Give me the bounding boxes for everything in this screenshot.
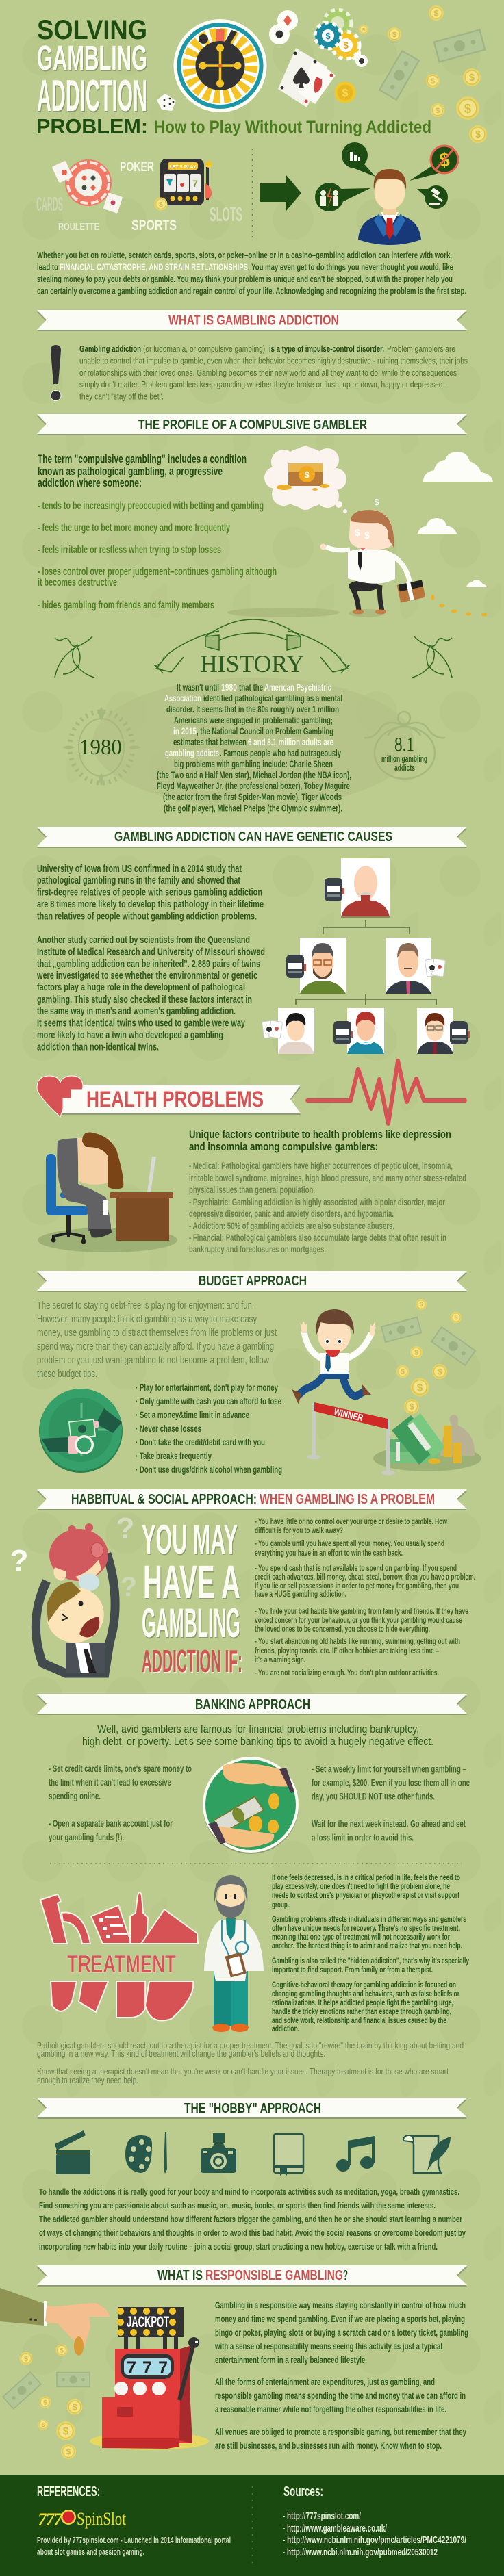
icon: poker chips	[315, 10, 360, 59]
title: SOLVING	[37, 15, 147, 45]
heading: budget approach: BUDGET APPROACH	[199, 1274, 307, 1289]
list: gambler traits: it becomes destructive	[38, 577, 117, 589]
heading: what is responsible gambling: ?	[343, 2268, 348, 2283]
text block: genetic causes: the same way in men's and women's gambling addiction.	[37, 1006, 236, 1017]
list: budget tips: · Set a money&time limit in advance	[136, 1410, 249, 1420]
icon: playing cards	[278, 48, 336, 107]
heading: history ribbon	[155, 619, 349, 678]
text block: therapy note: gambling in a new way. This kind of treatment will change the gambler's beliefs and thoughts.	[37, 2048, 325, 2059]
chart: family tree	[262, 858, 470, 1054]
icon: poker chips: $	[343, 40, 349, 51]
text block: history: . Famous people who had outrageously	[220, 747, 341, 758]
list: banking tips right: a loss limit in order to avoid this.	[312, 1833, 414, 1842]
heading: budget approach	[37, 1271, 467, 1292]
panel: footer	[0, 2475, 504, 2576]
callout: you may have a gambling addiction if: HAVE A	[144, 1557, 241, 1610]
heading: genetic causes: GAMBLING ADDICTION CAN HAVE GENETIC CAUSES	[114, 829, 392, 845]
list: gambler traits: - tends to be increasingly preoccupied with betting and gambling	[38, 500, 264, 512]
list: gambler traits: - feels irritable or restless when trying to stop losses	[38, 544, 221, 556]
heading: what is responsible gambling	[37, 2265, 467, 2287]
list: banking tips left: your gambling funds (!).	[49, 1832, 124, 1842]
portrait: child right	[417, 1008, 453, 1054]
panel: gambling types	[36, 159, 242, 233]
text block: health problems: - Addiction: 50% of gambling addicts are also substance abusers.	[189, 1221, 394, 1231]
icon: suit tokens	[269, 10, 368, 67]
title: GAMBLING	[37, 38, 147, 77]
text block: definition: Problem gamblers are	[387, 344, 455, 354]
icon: treatment lower symbols	[51, 1981, 193, 2020]
list: budget tips: · Play for entertainment, don't play for money	[136, 1382, 278, 1393]
text block: genetic causes: University of Iowa from US confirmed in a 2014 study that	[37, 864, 242, 875]
text block: definition: Gambling addiction	[79, 344, 141, 354]
heading: banking approach: BANKING APPROACH	[195, 1697, 310, 1712]
text block: genetic causes: Institute of Medical Research and University of Missouri showed	[37, 947, 265, 958]
icon: winner hurdle	[307, 1402, 395, 1476]
list: banking tips left: - Open a separate bank account just for	[49, 1818, 173, 1829]
stat: 8.1 million gambling addicts medallion: million gambling	[381, 754, 427, 764]
text block: genetic causes: than relatives of people without gambling addiction problems.	[37, 912, 257, 923]
text block: history	[157, 682, 351, 813]
decoration: right vine	[412, 636, 452, 678]
heading: references: REFERENCES:	[37, 2484, 100, 2499]
heading: habitual and social approach: WHEN GAMBLING IS A PROBLEM	[260, 1492, 435, 1507]
text: SLOTS	[210, 204, 242, 226]
heading: genetic causes	[37, 827, 467, 848]
text block: compulsive gambling lead	[38, 453, 247, 489]
portrait: child middle	[347, 1008, 384, 1054]
text block: history: It wasn't until	[177, 682, 219, 693]
list: warning signs: difficult is for you to walk away?	[255, 1527, 343, 1535]
text block: history: estimates that between	[173, 736, 247, 747]
list: gambler traits: - loses control over proper judgement–continues gambling although	[38, 566, 277, 578]
text block: budget intro	[37, 1300, 277, 1380]
logo: 777SpinSlot	[38, 2509, 127, 2529]
text block: genetic causes: addiction than non-identical twins.	[37, 1042, 159, 1053]
text block: definition: (or ludomania, or compulsive gambling),	[143, 344, 267, 354]
label: sports: SPORTS	[131, 218, 177, 233]
text block: history: identified pathological gambling as a mental	[203, 693, 342, 704]
icon: gold coins and bills	[334, 5, 487, 143]
icon: worried businessman with consequences: $	[439, 149, 450, 170]
panel: gambling types: CARDS	[36, 194, 63, 216]
list: source links	[283, 2511, 466, 2558]
text block: history: American Psychiatric	[264, 682, 331, 693]
portrait: father left	[300, 938, 346, 994]
text block: compulsive gambling lead: The term "compulsive gambling" includes a condition	[38, 453, 247, 465]
text block: genetic causes: are 8 times more likely to develop this pathology in their lifetime	[37, 899, 264, 910]
list: warning signs: - You are not socializing enough. You don't plan outdoor activities.	[255, 1669, 439, 1677]
list: warning signs: the loved ones to be concerned, you choose to hide everything.	[255, 1625, 430, 1634]
icon: music note	[336, 2136, 375, 2172]
text block: treatment: group.	[272, 1900, 289, 1909]
heading: health problems	[37, 1076, 301, 1117]
icon: thought bubble with treasure chest	[264, 446, 379, 513]
text block: health problems: depressive disorder, panic and anxiety disorders, and hypomania.	[189, 1209, 394, 1219]
text block: intro	[37, 250, 466, 296]
text block: health problems: physical issues than general population.	[189, 1185, 315, 1195]
icon: falling coins and bills	[3, 2345, 90, 2459]
icon: jackpot slot machine	[90, 2307, 209, 2450]
text block: history: gambling addicts	[165, 747, 219, 758]
label: roulette: ROULETTE	[58, 222, 99, 233]
logo: 777SpinSlot: SpinSlot	[77, 2509, 127, 2529]
text block: history: Association	[164, 693, 201, 704]
icon: time is money dial	[39, 1389, 123, 1473]
list: budget tips: · Only gamble with cash you can afford to lose	[136, 1396, 281, 1406]
callout: you may have a gambling addiction if	[142, 1517, 243, 1680]
list: banking tips right	[312, 1764, 470, 1842]
text block: genetic causes	[36, 864, 265, 1053]
icon: clouds	[418, 452, 493, 587]
list: warning signs	[255, 1518, 475, 1677]
icon: red chip	[52, 159, 123, 214]
text block: compulsive gambling lead: known as pathological gambling, a progressive	[38, 465, 223, 478]
callout: you may have a gambling addiction if: YOU MAY	[142, 1518, 238, 1564]
logo: 777SpinSlot: 777	[38, 2510, 63, 2529]
text block: budget intro: problem or you just want gambling to not become a problem, follow	[37, 1354, 269, 1366]
stat: 8.1 million gambling addicts medallion: addicts	[394, 762, 415, 773]
text block: definition: they can't "stay off the bet".	[79, 391, 164, 401]
list: banking tips left: the limit when it can't lead to excessive	[49, 1777, 171, 1788]
text block: genetic causes: factors play a huge role in the development of pathological	[37, 982, 245, 993]
list: budget tips: · Don't use drugs/drink alcohol when gambling	[136, 1465, 282, 1475]
heading: profile of a compulsive gambler	[37, 414, 467, 435]
list: budget tips: · Don't take the credit/debit card with you	[136, 1437, 265, 1447]
heading: the hobby approach	[37, 2098, 467, 2119]
text block: treatment: addiction.	[272, 2024, 299, 2033]
icon: daydreaming gambler	[227, 510, 487, 617]
icon: money pile and coins	[373, 1299, 481, 1471]
icon: palette and brush	[125, 2132, 167, 2174]
heading: what is responsible gambling: RESPONSIBLE GAMBLING	[205, 2268, 343, 2283]
text block: therapy note: enough to realize they need help.	[37, 2075, 138, 2085]
portrait: child left	[278, 1008, 314, 1054]
icon: man with piggy bank: ?	[10, 1544, 28, 1577]
text block: history: (the Two and a Half Men star), Michael Jordan (the NBA icon),	[157, 769, 351, 780]
text block: genetic causes: It seems that identical twins who used to gamble were way	[37, 1018, 245, 1029]
text block: intro: lead to	[37, 261, 58, 272]
text block: history: (the golf player), Michael Phelps (the Olympic swimmer).	[164, 802, 342, 813]
stat: 8.1 million gambling addicts medallion: 8.1	[394, 734, 414, 756]
heading: habitual and social approach	[37, 1489, 467, 1510]
list: warning signs: have a HUGE gambling addiction.	[255, 1590, 346, 1599]
stat: 1980 medallion	[62, 707, 141, 786]
text block: intro: FINANCIAL CATASTROPHE, AND STRAIN RETLATIONSHIPS	[60, 261, 248, 272]
icon: daydreaming gambler: $	[364, 530, 370, 541]
heading: profile of a compulsive gambler: THE PROFILE OF A COMPULSIVE GAMBLER	[138, 417, 367, 433]
icon: thought bubble with treasure chest: $	[304, 469, 310, 480]
list: warning signs: everything you have in an effort to win the cash back.	[255, 1549, 403, 1558]
text block: health problems	[189, 1128, 466, 1254]
title: ADDICTION	[38, 72, 148, 122]
text block: genetic causes: were investigated to see whether the environmental or genetic	[36, 970, 257, 981]
text block: health problems: and insomnia among compulsive gamblers:	[189, 1140, 378, 1153]
text block: provider: Provided by 777spinslot.com - Launched in 2014 informational portal	[37, 2535, 231, 2545]
text block: history: (the actor from the first Spider-Man movie), Tiger Woods	[163, 791, 342, 802]
title: GAMBLING	[38, 40, 148, 79]
heading: history ribbon: HISTORY	[200, 650, 304, 678]
list: banking tips left: spending online.	[49, 1791, 101, 1801]
text: GAMBLING	[142, 1601, 241, 1647]
icon: doctor	[204, 1875, 264, 2032]
text block: budget intro: spend way more than they can actually afford. If you have a gambling	[37, 1341, 274, 1352]
text block: treatment	[272, 1872, 469, 2033]
arrow	[260, 175, 301, 211]
heading: what is gambling addiction: WHAT IS GAMBLING ADDICTION	[168, 313, 339, 329]
callout: you may have a gambling addiction if: HAVE A	[143, 1556, 240, 1608]
icon: roulette wheel	[174, 19, 267, 112]
icon: hand dropping coin	[0, 2288, 110, 2356]
text block: responsible gambling	[214, 2300, 468, 2451]
text block: history: in 2015	[173, 725, 197, 736]
text block: history: Americans were engaged in problematic gambling;	[174, 714, 333, 725]
list: warning signs: it's a warning sign.	[255, 1656, 305, 1664]
heading: banking approach	[37, 1694, 467, 1715]
text: ADDICTION IF:	[142, 1643, 242, 1679]
heading: habitual and social approach: HABBITUAL & SOCIAL APPROACH:	[71, 1492, 257, 1507]
text block: budget intro: The secret to staying debt-free is playing for enjoyment and fun.	[37, 1300, 254, 1311]
icon: poker chips: $	[325, 31, 331, 41]
text block: budget intro: these budget tips.	[37, 1368, 97, 1380]
text block: therapy note	[37, 2040, 464, 2085]
icon: scroll and quill	[403, 2135, 451, 2173]
icon: man with piggy bank	[10, 1512, 137, 1673]
decoration: left vine	[55, 636, 94, 678]
text block: provider: about slot games and passion gaming.	[37, 2547, 144, 2557]
list: banking tips left	[49, 1764, 192, 1842]
heading: health problems: HEALTH PROBLEMS	[86, 1087, 264, 1111]
text block: treatment: important to find support. From family or from a therapist.	[272, 1965, 433, 1974]
list: budget tips	[136, 1382, 282, 1475]
list: source links: - http://www.ncbi.nlm.nih.gov/pubmed/20530012	[283, 2547, 438, 2558]
icon: slot machine: LET'S PLAY	[169, 165, 197, 170]
label: poker: POKER	[120, 160, 154, 175]
icon: man at desk	[38, 1133, 177, 1252]
icon: slot machine: 7	[192, 178, 198, 189]
title: ADDICTION	[37, 70, 147, 120]
icon: treatment medical symbols	[40, 1892, 198, 1944]
heading: what is gambling addiction	[37, 310, 467, 331]
text block: definition: is a type of impulse-control disorder.	[269, 344, 384, 354]
icon: winner hurdle: WINNER	[333, 1406, 364, 1424]
list: source links: - http://777spinslot.com/	[283, 2511, 361, 2522]
text block: compulsive gambling lead: addiction where someone:	[38, 477, 142, 489]
icon: jackpot slot machine: 777	[127, 2358, 168, 2378]
text block: history: big problems with gambling include: Charlie Sheen	[174, 758, 333, 769]
icon: dice	[157, 94, 176, 111]
text block: banking intro: Well, avid gamblers are famous for financial problems including bankruptcy,	[97, 1723, 419, 1736]
icon: camera	[201, 2133, 236, 2173]
list: budget tips: · Take breaks frequently	[136, 1451, 212, 1461]
text block: history: that the	[239, 682, 263, 693]
icon: hands exchanging money	[203, 1757, 299, 1854]
icon: gold coins and bills: $	[342, 88, 349, 99]
text: GAMBLING	[142, 1600, 240, 1646]
heading: treatment: TREATMENT	[67, 1950, 176, 1978]
callout: you may have a gambling addiction if: YOU MAY	[142, 1517, 238, 1562]
list: gambler traits: - hides gambling from friends and family members	[38, 600, 214, 611]
icon: thought bubble with treasure chest: $	[374, 497, 379, 507]
text block: history: 6 and 8.1 million adults are	[248, 736, 333, 747]
text block: history: Floyd Mayweather Jr. (the professional boxer), Tobey Maguire	[157, 780, 350, 791]
icon: jumping businessman	[292, 1309, 376, 1404]
text: ADDICTION IF:	[142, 1645, 243, 1680]
icon: exclamation mark	[51, 345, 61, 401]
text block: banking intro: high debt, or poverty. Let's see some banking tips to avoid a hugely negative effect.	[82, 1735, 433, 1748]
list: source links: - http://www.gambleaware.co.uk/	[283, 2523, 387, 2534]
text block: genetic causes: gambling. This study also checked if these factors interact in	[37, 994, 252, 1005]
text block: responsible gambling: entertainment form in a really balanced lifestyle.	[215, 2354, 367, 2365]
list: banking tips left: - Set credit cards limits, one's spare money to	[49, 1764, 192, 1774]
icon: jackpot slot machine: JACKPOT	[127, 2313, 169, 2330]
title: PROBLEM:	[36, 114, 148, 138]
text block: health problems: bankruptcy and foreclosures on mortgages.	[189, 1244, 326, 1254]
text block: history: , the National Council on Problem Gambling	[197, 725, 333, 736]
text block: genetic causes: more likely to have a twin who developed a gambling	[37, 1030, 223, 1041]
icon: man with piggy bank: ?	[116, 1512, 134, 1545]
icon: book	[274, 2134, 303, 2176]
icon: daydreaming gambler: $	[355, 527, 360, 538]
heading: what is responsible gambling: WHAT IS	[158, 2268, 203, 2283]
text block: hobby approach	[39, 2187, 466, 2252]
text block: history: disorder. It seems that in the 80s roughly over 1 million	[166, 704, 339, 714]
text block: banking intro	[82, 1723, 433, 1748]
list: gambler traits	[38, 500, 277, 611]
portrait: father right	[386, 938, 431, 994]
text block: budget intro: money, use gambling to distract themselves from life problems or just	[37, 1327, 277, 1339]
list: budget tips: · Never chase losses	[136, 1424, 201, 1434]
text block: budget intro: However, many people think of gambling as a way to make easy	[37, 1313, 257, 1325]
portrait: grandfather	[341, 858, 390, 918]
chart: heartbeat line	[307, 1061, 465, 1124]
heading: sources: Sources:	[284, 2484, 323, 2499]
text block: genetic causes: first-degree relatives of people with serious gambling addiction	[37, 887, 262, 898]
stat: 1980 medallion: 1980	[79, 734, 122, 759]
heading: the hobby approach: THE "HOBBY" APPROACH	[184, 2101, 321, 2116]
text block: genetic causes: pathological gambling runs in the family and showed that	[37, 875, 240, 886]
text block: definition	[79, 344, 468, 401]
stat: 8.1 million gambling addicts medallion	[364, 712, 445, 779]
text block: genetic causes: that „gambling addiction can be inherited”. 2,889 pairs of twins	[37, 959, 260, 970]
text block: history: 1980	[221, 682, 237, 693]
title	[36, 15, 431, 138]
icon: worried businessman with consequences	[315, 142, 458, 245]
text block: genetic causes: Another study carried out by scientists from the Queensland	[37, 935, 250, 946]
list: banking tips right: day, you SHOULD NOT use other funds.	[312, 1792, 435, 1801]
icon: slot machine	[155, 159, 212, 211]
icon: film clapper	[55, 2130, 90, 2174]
title: How to Play Without Turning Addicted	[154, 118, 431, 137]
list: gambler traits: - feels the urge to bet more money and more frequently	[38, 522, 230, 534]
list: warning signs: friends, playing tennis, etc. IF other hobbies are taking less time –	[255, 1647, 439, 1656]
background brush	[92, 678, 414, 808]
text block: provider	[37, 2535, 231, 2557]
icon: man with piggy bank: ?	[121, 1572, 137, 1602]
